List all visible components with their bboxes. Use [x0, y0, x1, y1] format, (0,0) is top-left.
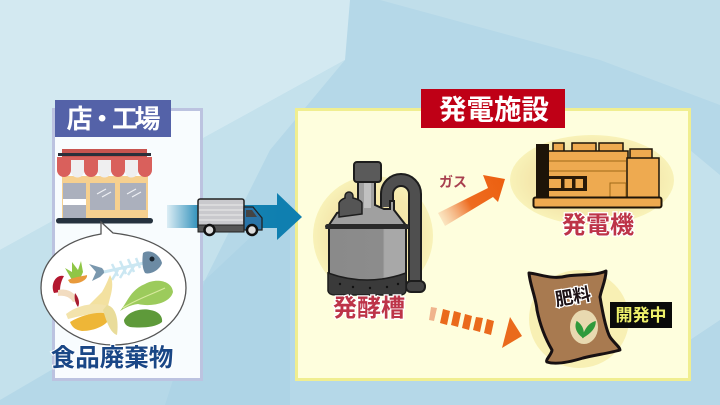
panel: shop and factory	[41, 100, 202, 380]
icon: food waste	[53, 251, 173, 335]
heading: shop and factory: 店・工場	[66, 104, 160, 134]
panel frame	[54, 110, 202, 380]
leafy greens	[120, 281, 173, 327]
arrow: fertilizer in development	[429, 307, 522, 348]
label: food waste: 食品廃棄物	[51, 344, 173, 372]
icon: truck	[198, 199, 262, 235]
badge: in development: 開発中	[616, 306, 666, 325]
panel frame	[296, 110, 690, 380]
banana peel	[66, 275, 118, 335]
arrow: transport	[167, 193, 302, 240]
vegetable scrap	[65, 261, 87, 283]
icon: fertilizer sack: 肥料	[554, 284, 592, 310]
label: gas: ガス	[439, 174, 467, 190]
icon: fertilizer sack	[529, 270, 629, 368]
fish bones	[89, 251, 162, 281]
heading: power generation facility	[421, 89, 565, 128]
heading: power generation facility: 発電施設	[439, 94, 549, 125]
arrow: gas	[438, 175, 505, 226]
panel: power generation facility	[296, 89, 690, 380]
icon: fermentation tank	[313, 162, 433, 296]
badge: in development	[610, 302, 672, 328]
heading: shop and factory	[55, 100, 171, 137]
shrimp	[53, 276, 79, 307]
icon: generator	[510, 135, 674, 225]
icon: store	[56, 149, 153, 224]
label: generator: 発電機	[562, 212, 634, 239]
speech bubble	[41, 222, 186, 345]
label: fermentation tank: 発酵槽	[333, 295, 405, 322]
